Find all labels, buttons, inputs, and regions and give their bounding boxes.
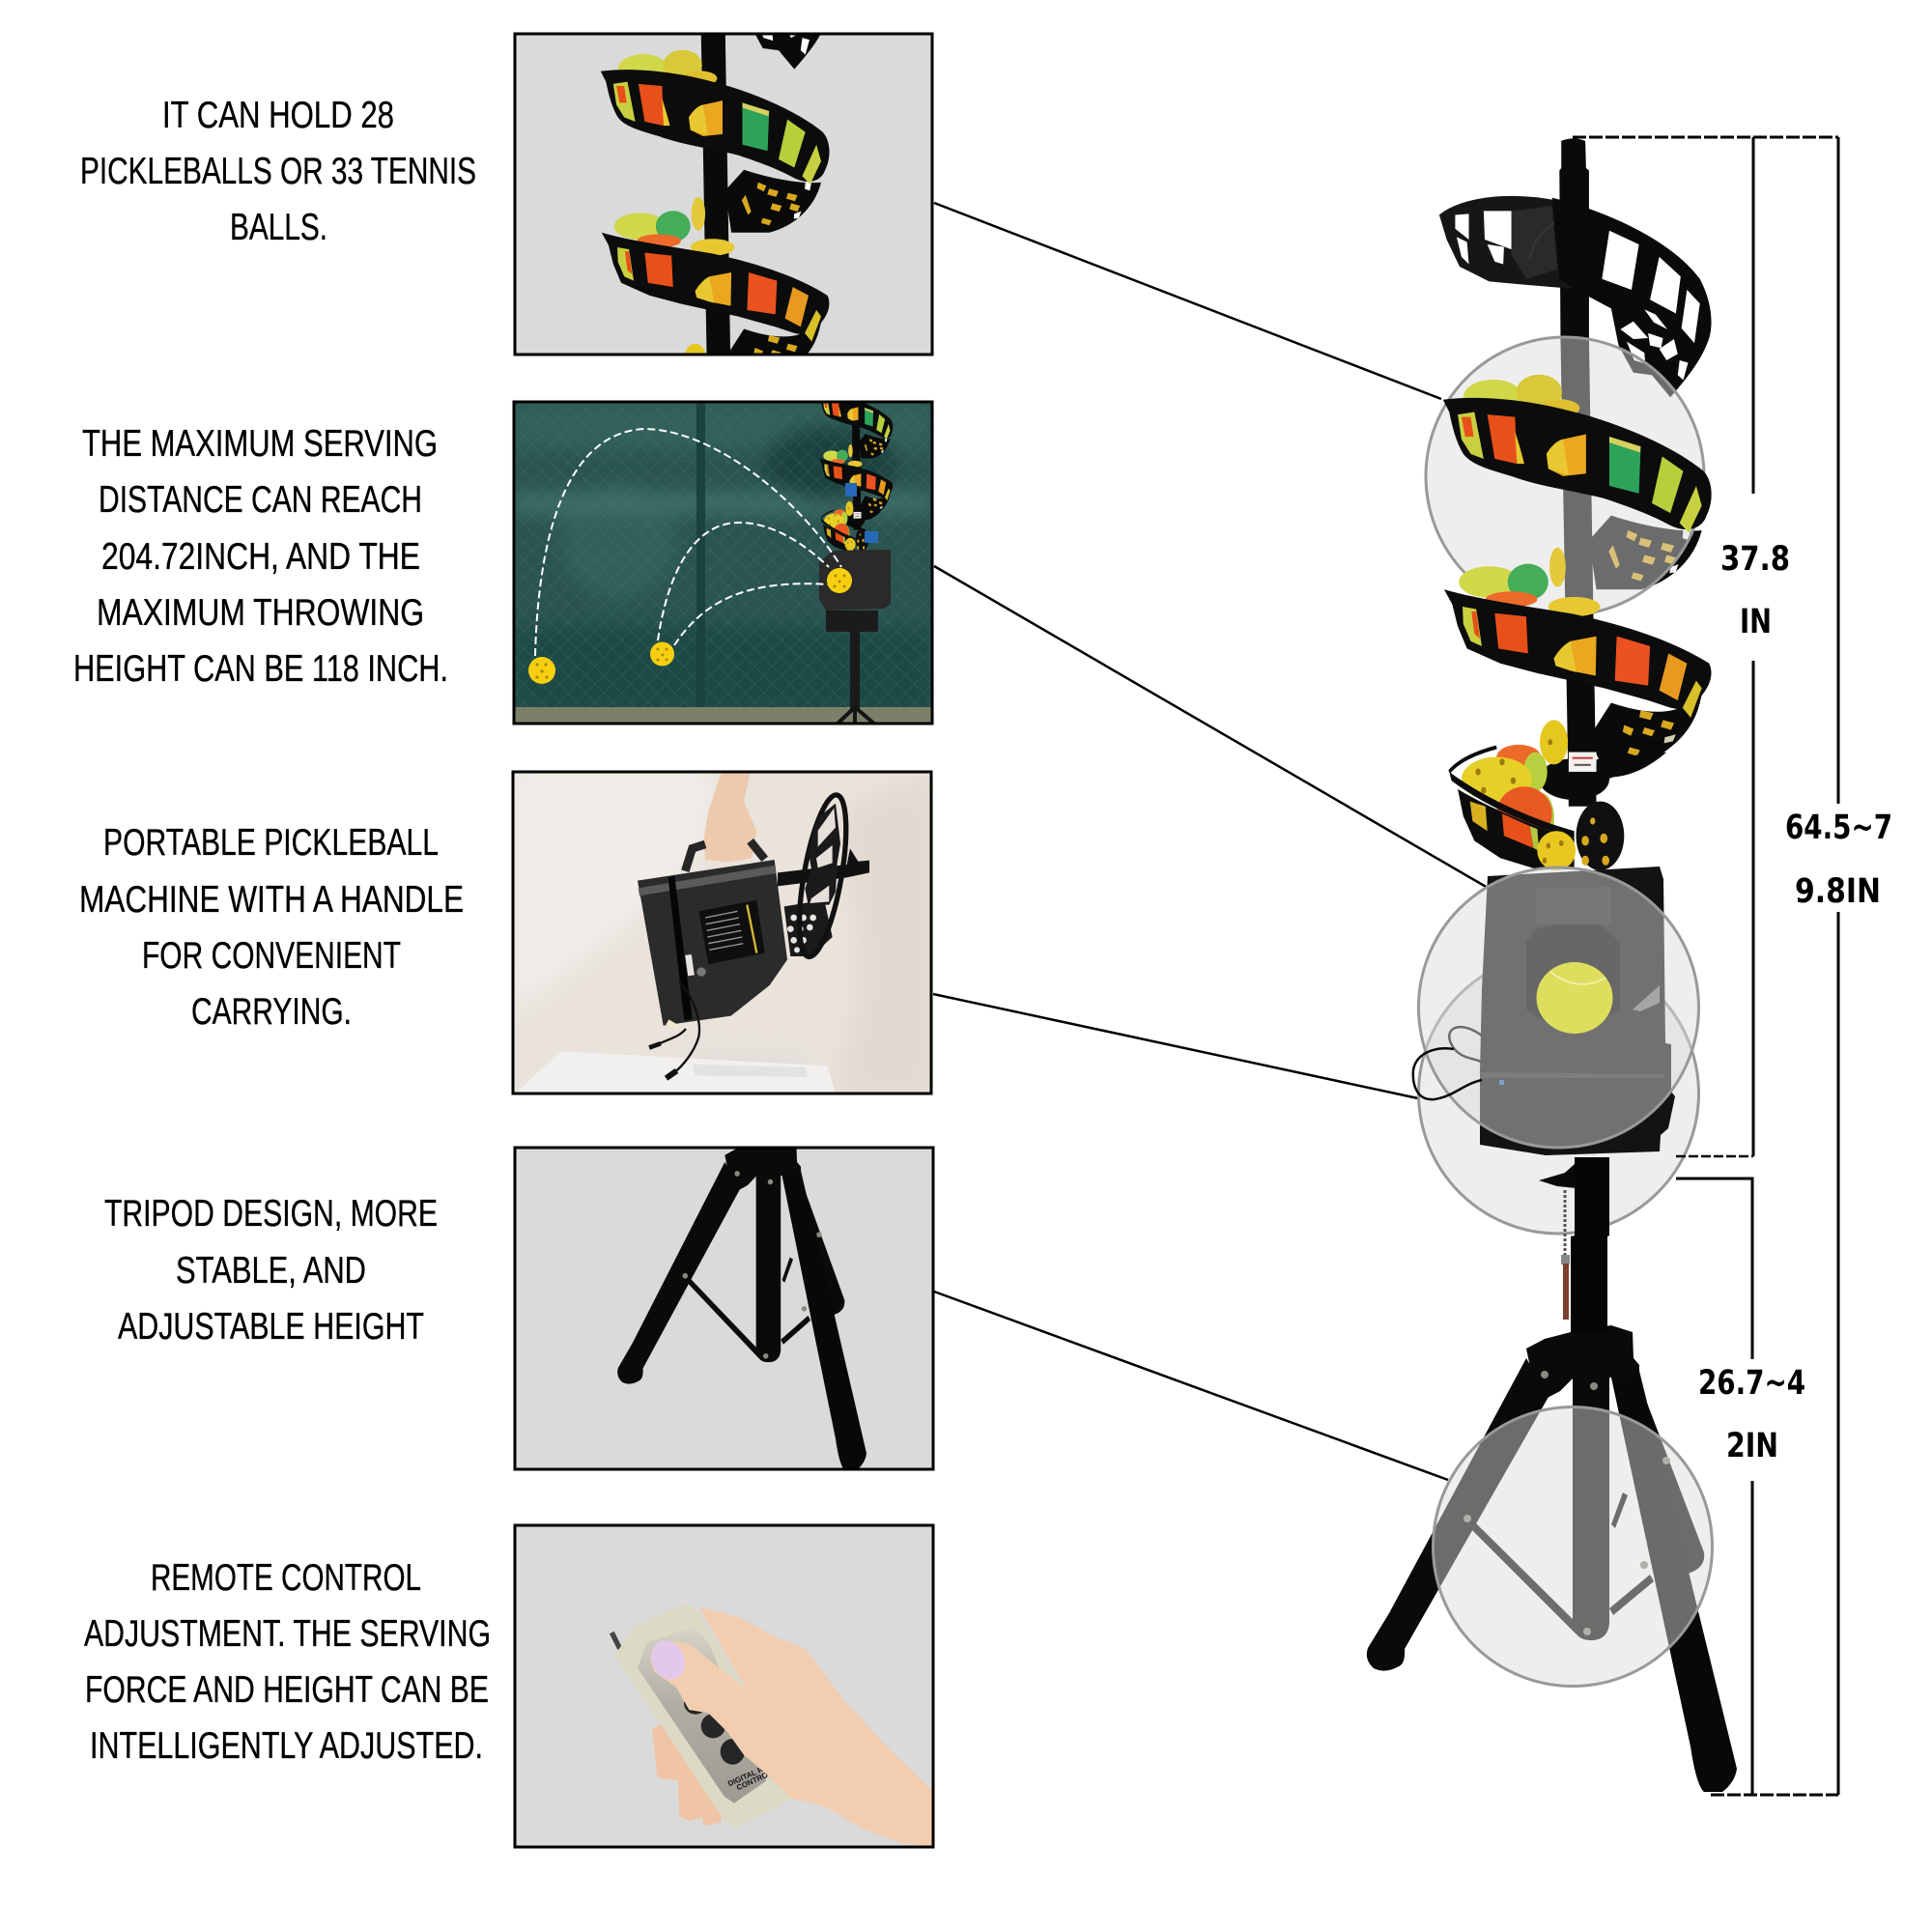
buttons <box>684 1701 744 1765</box>
text: serving distance: MAXIMUM THROWING <box>97 592 424 634</box>
dimension: 64.5~79.8 IN: 64.5~7 <box>1785 809 1892 847</box>
connector line: tripod <box>934 1292 1448 1480</box>
bolts <box>1463 1371 1670 1635</box>
hopper <box>784 792 855 960</box>
dimension: 26.7~42 IN: 2IN <box>1726 1427 1778 1465</box>
panel 4: tripod close-up <box>514 1146 935 1470</box>
bottom basket <box>1449 720 1666 870</box>
panel 2: serving trajectories <box>512 400 933 724</box>
text: remote control: INTELLIGENTLY ADJUSTED. <box>90 1725 483 1767</box>
cable lower <box>1413 1048 1482 1099</box>
text: capacity: IT CAN HOLD 28 <box>162 95 394 136</box>
text: tripod: STABLE, AND <box>176 1250 366 1292</box>
text: tripod: ADJUSTABLE HEIGHT <box>118 1306 424 1348</box>
text: capacity: PICKLEBALLS OR 33 TENNIS <box>80 151 476 192</box>
handle <box>685 841 765 871</box>
machine: tripod stand <box>1367 1157 1737 1792</box>
trajectories <box>535 429 841 656</box>
text: remote control: REMOTE CONTROL <box>151 1557 421 1599</box>
highlight circle: portable lower <box>1418 953 1698 1234</box>
remote body <box>615 1604 792 1829</box>
connector line: handle <box>933 994 1418 1098</box>
text: tripod: TRIPOD DESIGN, MORE <box>104 1193 438 1235</box>
text: remote control: FORCE AND HEIGHT CAN BE <box>85 1669 489 1711</box>
antenna <box>611 1633 620 1649</box>
right leg <box>1611 1371 1737 1792</box>
panel 3: carrying by handle <box>512 770 934 1094</box>
text: capacity <box>80 95 476 248</box>
panel 5: remote in hand <box>515 1525 933 1848</box>
hand <box>650 1606 932 1848</box>
table <box>514 1051 836 1094</box>
text: portable handle: PORTABLE PICKLEBALL <box>103 822 439 864</box>
third basket <box>1444 548 1712 718</box>
machine: serving unit body <box>1449 867 1675 1155</box>
dimension: 26.7~42 IN <box>1676 1179 1805 1795</box>
lock handle <box>1539 1164 1577 1188</box>
arm and hand <box>703 773 756 863</box>
top basket left bowl <box>1439 196 1575 289</box>
mini machine <box>819 404 893 723</box>
text: serving distance: THE MAXIMUM SERVING <box>82 423 438 465</box>
back right leg <box>1637 1378 1704 1575</box>
lower fingers <box>652 1722 722 1826</box>
text: portable handle: CARRYING. <box>191 991 352 1033</box>
text: remote control: ADJUSTMENT. THE SERVING <box>84 1613 491 1655</box>
pole <box>1559 138 1597 807</box>
info label <box>698 900 765 964</box>
second basket rear lattice <box>1589 516 1702 589</box>
machine body <box>638 860 787 1026</box>
column <box>1571 1157 1609 1332</box>
highlight circle: serving head <box>1418 867 1698 1148</box>
text: portable handle <box>79 822 464 1033</box>
text: serving distance: 204.72INCH, AND THE <box>101 536 420 578</box>
dimension: 37.8 IN: IN <box>1740 603 1772 641</box>
text: portable handle: MACHINE WITH A HANDLE <box>79 879 464 921</box>
dimension: 64.5~79.8 IN <box>1573 137 1892 1795</box>
machine: pole, top basket and rear lattice <box>1439 138 1712 807</box>
second basket <box>1443 375 1712 533</box>
highlight circle: ball hopper <box>1426 337 1704 615</box>
chain and pin <box>1561 1190 1570 1320</box>
text: serving distance: DISTANCE CAN REACH <box>99 479 422 521</box>
remote label: DIGITAL R <box>726 1765 765 1788</box>
cables <box>657 982 699 1074</box>
text: tripod <box>104 1193 438 1348</box>
text: serving distance: HEIGHT CAN BE 118 INCH. <box>73 648 448 690</box>
dimension: 37.8 IN: 37.8 <box>1720 540 1790 579</box>
left leg <box>1367 1358 1548 1671</box>
remote label: CONTRO <box>735 1771 769 1792</box>
text: portable handle: FOR CONVENIENT <box>142 935 401 977</box>
text: remote control <box>84 1557 491 1767</box>
pole <box>778 848 869 886</box>
panel 1: hopper close-up <box>514 33 933 355</box>
connector line: serving distance <box>934 566 1488 888</box>
pickleballs <box>528 568 852 684</box>
hub <box>1526 1325 1639 1399</box>
tennis ball in machine <box>1536 962 1613 1034</box>
top basket right spiral <box>1552 198 1712 397</box>
dimension: 37.8 IN <box>1676 137 1790 1156</box>
dimension: 64.5~79.8 IN: 9.8IN <box>1795 872 1881 911</box>
dimension: 26.7~42 IN: 26.7~4 <box>1698 1364 1805 1403</box>
third basket rear lattice <box>1589 693 1702 780</box>
cable upper <box>1449 1027 1482 1063</box>
highlight circle: tripod <box>1434 1406 1712 1687</box>
machine: ball tower front baskets <box>1443 375 1712 870</box>
text: capacity: BALLS. <box>230 207 327 248</box>
text: serving distance <box>73 423 448 690</box>
braces <box>1471 1492 1654 1634</box>
center leg <box>1573 1352 1609 1640</box>
connector line: capacity <box>934 203 1441 399</box>
thumbnail <box>651 1640 686 1679</box>
